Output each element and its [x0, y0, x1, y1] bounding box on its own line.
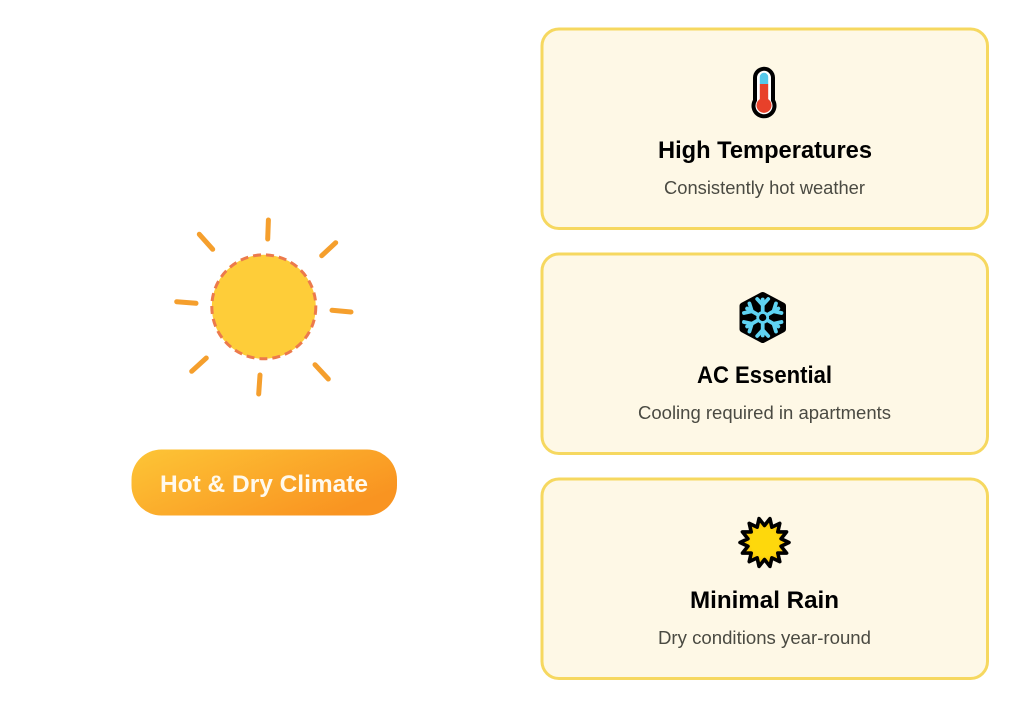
climate label pill [132, 450, 397, 516]
panel: high temperatures [542, 29, 988, 228]
icon: sun [177, 220, 351, 394]
icon: snowflake [743, 296, 782, 340]
description: Consistently hot weather [664, 178, 865, 198]
icon: thermometer [754, 69, 774, 116]
heading: Minimal Rain [690, 587, 839, 614]
description: Cooling required in apartments [638, 403, 891, 423]
heading: High Temperatures [658, 137, 872, 164]
panel: AC essential [542, 254, 988, 454]
panel: minimal rain [542, 479, 988, 678]
icon: spiky sun [740, 519, 789, 566]
climate label pill: Hot & Dry Climate [160, 471, 368, 498]
heading: AC Essential [697, 362, 832, 389]
sun rays [177, 220, 351, 394]
description: Dry conditions year-round [658, 628, 871, 648]
sun disc [212, 255, 316, 359]
